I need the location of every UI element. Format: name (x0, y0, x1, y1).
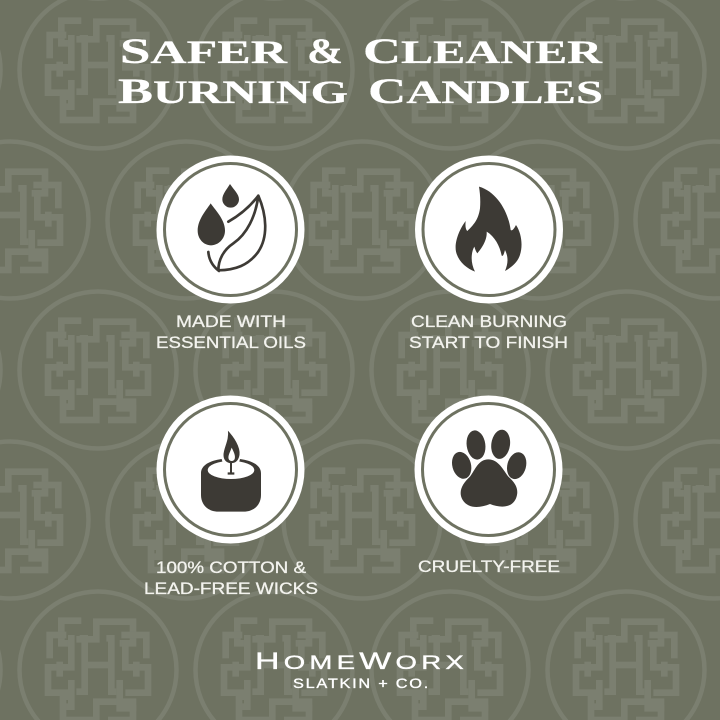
badge: essential oils (156, 156, 304, 304)
label: clean burning start to finish: CLEAN BURNING (411, 313, 567, 331)
feature: cruelty-free (414, 396, 562, 576)
title: B URNING (118, 71, 348, 111)
badge: wicks (156, 396, 304, 544)
label: made with essential oils (156, 313, 306, 352)
logo: HomeWorx Slatkin + Co. (255, 648, 468, 691)
label: 100% cotton and lead-free wicks (144, 559, 318, 598)
title: S AFER (120, 31, 289, 71)
label: made with essential oils: MADE WITH (176, 313, 286, 331)
title: C ANDLES (368, 71, 603, 111)
feature: cotton and lead-free wicks (144, 396, 318, 598)
label: 100% cotton and lead-free wicks: LEAD-FREE WICKS (144, 580, 318, 598)
icon: drops and leaf (198, 184, 265, 271)
title (118, 31, 604, 111)
icon: paw print (449, 429, 529, 507)
badge: cruelty-free (414, 396, 562, 544)
label: clean burning start to finish (409, 313, 568, 352)
feature: clean burning (409, 156, 568, 352)
label: made with essential oils: ESSENTIAL OILS (156, 334, 306, 352)
feature: made with essential oils (156, 156, 306, 352)
title: & (307, 31, 343, 71)
logo: HomeWorx Slatkin + Co.: H OME W ORX (255, 648, 468, 675)
logo: HomeWorx Slatkin + Co.: SLATKIN + CO. (293, 675, 430, 691)
icon: flame (456, 187, 522, 272)
label: cruelty-free: CRUELTY-FREE (418, 558, 560, 576)
badge: clean burning (415, 156, 563, 304)
title: C LEANER (363, 31, 604, 71)
icon: tealight candle (201, 429, 261, 512)
label: 100% cotton and lead-free wicks: 100% COTTON & (156, 559, 306, 577)
label: clean burning start to finish: START TO FINISH (409, 334, 568, 352)
